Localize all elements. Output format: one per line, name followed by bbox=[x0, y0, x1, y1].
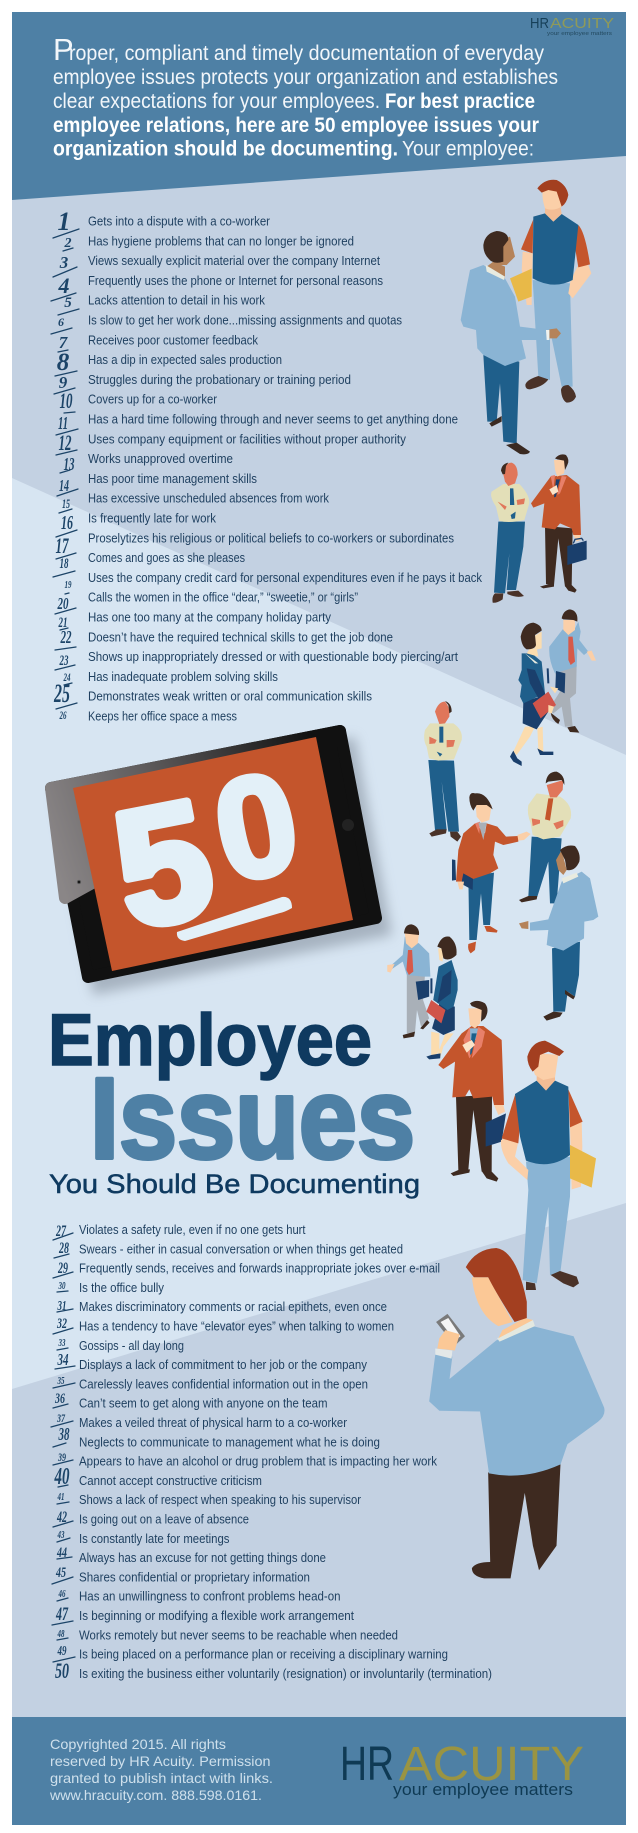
issue 29: 29 bbox=[57, 1260, 68, 1277]
issue 4: Frequently uses the phone or Internet for personal reasons bbox=[88, 273, 383, 288]
issue 11 bbox=[56, 412, 458, 435]
issue 47: 47 bbox=[55, 1604, 69, 1625]
issue 50 bbox=[55, 1658, 492, 1683]
issue 14: 14 bbox=[59, 476, 69, 495]
issue 39 bbox=[53, 1450, 437, 1469]
footer copyright: www.hracuity.com. 888.598.0161. bbox=[49, 1787, 262, 1803]
issue 20 bbox=[55, 590, 358, 614]
issue 9 bbox=[54, 372, 351, 394]
issue 17: 17 bbox=[56, 533, 69, 558]
issue 33: 33 bbox=[58, 1337, 66, 1349]
issue 12 bbox=[56, 430, 406, 455]
issue 8: 8 bbox=[57, 349, 70, 376]
issue 29 bbox=[53, 1260, 440, 1278]
issue 37 bbox=[51, 1411, 348, 1430]
issue 2: Has hygiene problems that can no longer be ignored bbox=[88, 233, 354, 248]
intro text: clear expectations for your employees. bbox=[53, 90, 380, 113]
issue 45 bbox=[52, 1565, 310, 1584]
issue 23: 23 bbox=[59, 653, 69, 669]
issue 36 bbox=[53, 1391, 328, 1411]
issue 32: Has a tendency to have “elevator eyes” when talking to women bbox=[79, 1318, 394, 1334]
issue 5: 5 bbox=[64, 295, 72, 311]
issue 44: 44 bbox=[56, 1545, 67, 1561]
issue 15 bbox=[59, 491, 329, 513]
issue 39: Appears to have an alcohol or drug problem that is impacting her work bbox=[79, 1454, 437, 1469]
issue 16: Is frequently late for work bbox=[88, 510, 216, 526]
issue 8: Has a dip in expected sales production bbox=[88, 352, 282, 367]
issue 48: 48 bbox=[57, 1628, 65, 1640]
intro text: Your employee: bbox=[402, 138, 534, 160]
issue 6 bbox=[51, 312, 402, 334]
issue 12: Uses company equipment or facilities without proper authority bbox=[88, 431, 406, 446]
issue 48: Works remotely but never seems to be reachable when needed bbox=[79, 1627, 398, 1642]
issue 13: 13 bbox=[64, 454, 74, 474]
issue 10: 10 bbox=[60, 388, 72, 413]
issue 47 bbox=[52, 1604, 354, 1625]
figures: group of three and man in sweater bbox=[424, 701, 598, 1021]
issue 41: Shows a lack of respect when speaking to his supervisor bbox=[79, 1492, 362, 1507]
top logo: ACUITY bbox=[550, 15, 614, 32]
issue 1: Gets into a dispute with a co-worker bbox=[88, 214, 271, 228]
issue 28: Swears - either in casual conversation or when things get heated bbox=[79, 1241, 403, 1256]
issue 30: 30 bbox=[58, 1280, 66, 1292]
issue 22: Doesn’t have the required technical skills to get the job done bbox=[88, 629, 393, 644]
issue 45: Shares confidential or proprietary information bbox=[79, 1569, 310, 1584]
issue 22 bbox=[55, 627, 393, 650]
tablet with 50: 5 bbox=[101, 765, 226, 963]
issue 25: 25 bbox=[53, 679, 70, 708]
issue 12: 12 bbox=[58, 430, 72, 455]
issue 13: Works unapproved overtime bbox=[88, 451, 233, 466]
issue 19 bbox=[64, 570, 482, 594]
issue 2: 2 bbox=[64, 236, 72, 251]
issue 18 bbox=[53, 550, 245, 577]
issue 18: 18 bbox=[60, 556, 69, 572]
issue 5 bbox=[58, 293, 265, 315]
issue 34: 34 bbox=[57, 1350, 68, 1369]
top logo: your employee matters bbox=[547, 31, 613, 37]
issue 42 bbox=[53, 1509, 249, 1527]
issue 30: Is the office bully bbox=[79, 1280, 164, 1295]
issue 37: Makes a veiled threat of physical harm to a co-worker bbox=[79, 1415, 348, 1430]
issue list 1 to 26 bbox=[51, 207, 482, 724]
issue 41: 41 bbox=[57, 1491, 64, 1503]
issue 23 bbox=[55, 649, 458, 670]
intro text: roper, compliant and timely documentation of everyday bbox=[69, 42, 544, 65]
issue 42: Is going out on a leave of absence bbox=[79, 1512, 249, 1526]
issue 16: 16 bbox=[61, 512, 73, 534]
issue 50: Is exiting the business either voluntarily (resignation) or involuntarily (termination) bbox=[79, 1666, 492, 1681]
issue 31: 31 bbox=[57, 1299, 66, 1314]
issue 37: 37 bbox=[56, 1411, 66, 1425]
issue 24: Has inadequate problem solving skills bbox=[88, 669, 278, 684]
issue 42: 42 bbox=[56, 1509, 67, 1526]
issue 15: Has excessive unscheduled absences from work bbox=[88, 491, 329, 506]
issue 20: Calls the women in the office “dear,” “sweetie,” or “girls” bbox=[88, 590, 358, 605]
issue 23: Shows up inappropriately dressed or with questionable body piercing/art bbox=[88, 649, 458, 664]
issue 34: Displays a lack of commitment to her job or the company bbox=[79, 1357, 367, 1372]
figures: bald man and man in orange jacket, walking pair bbox=[491, 454, 596, 766]
footer copyright: granted to publish intact with links. bbox=[50, 1770, 273, 1786]
issue 40: Cannot accept constructive criticism bbox=[79, 1473, 262, 1488]
footer copyright: Copyrighted 2015. All rights bbox=[50, 1736, 226, 1752]
figures: man in orange jacket and man with folder bbox=[438, 1001, 596, 1290]
issue 35: Carelessly leaves confidential information out in the open bbox=[79, 1376, 368, 1391]
issue 40: 40 bbox=[54, 1464, 70, 1490]
issue 6: 6 bbox=[58, 315, 64, 329]
footer logo: HR bbox=[340, 1738, 394, 1791]
issue 29: Frequently sends, receives and forwards inappropriate jokes over e-mail bbox=[79, 1261, 440, 1276]
issue 10 bbox=[60, 388, 218, 413]
issue 19: 19 bbox=[64, 579, 72, 591]
light diagonal band bbox=[12, 478, 626, 1389]
issue 38: 38 bbox=[58, 1424, 70, 1444]
title: Employee: Employee bbox=[48, 1000, 372, 1081]
issue 28 bbox=[54, 1240, 403, 1258]
issue 39: 39 bbox=[57, 1450, 66, 1464]
footer band bbox=[12, 1717, 626, 1825]
issue 43: 43 bbox=[57, 1529, 65, 1541]
figure: man from behind looking at phone bbox=[429, 1248, 605, 1578]
issue 15: 15 bbox=[62, 496, 70, 511]
issue 21: 21 bbox=[58, 615, 68, 631]
issue 13 bbox=[60, 451, 233, 474]
top logo: HR bbox=[530, 15, 549, 32]
issue 4: 4 bbox=[58, 273, 70, 298]
issue 21 bbox=[58, 610, 331, 631]
issue 45: 45 bbox=[55, 1565, 66, 1581]
issue 27: 27 bbox=[55, 1223, 67, 1240]
issue 18: Comes and goes as she pleases bbox=[88, 550, 245, 565]
issue 46: Has an unwillingness to confront problems head-on bbox=[79, 1589, 340, 1604]
issue 22: 22 bbox=[60, 627, 72, 647]
header banner bbox=[12, 12, 626, 200]
issue 46: 46 bbox=[58, 1588, 66, 1600]
issue 5: Lacks attention to detail in his work bbox=[88, 293, 265, 308]
issue 31: Makes discriminatory comments or racial epithets, even once bbox=[79, 1299, 387, 1314]
issue 33 bbox=[57, 1337, 184, 1353]
issue 14 bbox=[57, 471, 257, 496]
issue 32 bbox=[53, 1316, 394, 1334]
issue 3: 3 bbox=[59, 253, 69, 272]
issue 20: 20 bbox=[57, 594, 69, 613]
issue 1: 1 bbox=[58, 207, 70, 236]
intro text: organization should be documenting. bbox=[53, 138, 398, 160]
issue 9: 9 bbox=[59, 373, 68, 392]
issue 26: 26 bbox=[59, 708, 66, 722]
issue 21: Has one too many at the company holiday party bbox=[88, 610, 331, 624]
issue 27: Violates a safety rule, even if no one gets hurt bbox=[79, 1222, 306, 1237]
issue 17: Proselytizes his religious or political beliefs to co-workers or subordinates bbox=[88, 530, 454, 545]
issue 43: Is constantly late for meetings bbox=[79, 1531, 230, 1546]
issue 19: Uses the company credit card for personal expenditures even if he pays it back bbox=[88, 570, 482, 585]
issue 8 bbox=[55, 349, 282, 376]
issue 11: Has a hard time following through and never seems to get anything done bbox=[88, 412, 458, 426]
issue 17 bbox=[56, 530, 454, 559]
footer logo bbox=[340, 1738, 584, 1799]
footer copyright: reserved by HR Acuity. Permission bbox=[50, 1753, 270, 1769]
issue 49: Is being placed on a performance plan or receiving a disciplinary warning bbox=[79, 1647, 448, 1662]
intro text bbox=[53, 32, 558, 160]
issue list 27 to 50 bbox=[51, 1222, 492, 1683]
issue 14: Has poor time management skills bbox=[88, 471, 257, 486]
issue 40 bbox=[54, 1464, 262, 1490]
issue 7: Receives poor customer feedback bbox=[88, 332, 258, 347]
issue 47: Is beginning or modifying a flexible work arrangement bbox=[79, 1608, 354, 1623]
intro text: employee relations, here are 50 employee issues your bbox=[53, 114, 539, 137]
issue 38 bbox=[53, 1424, 380, 1449]
issue 10: Covers up for a co-worker bbox=[88, 392, 218, 407]
intro text: P bbox=[53, 32, 74, 67]
issue 50: 50 bbox=[55, 1658, 69, 1683]
issue 36: Can’t seem to get along with anyone on the team bbox=[79, 1396, 328, 1411]
issue 33: Gossips - all day long bbox=[79, 1338, 184, 1353]
issue 26: Keeps her office space a mess bbox=[88, 708, 237, 724]
footer copyright bbox=[49, 1736, 273, 1803]
issue 35: 35 bbox=[57, 1375, 65, 1387]
issue 7 bbox=[58, 332, 258, 352]
issue 11: 11 bbox=[58, 413, 68, 433]
tablet with 50 bbox=[51, 731, 392, 995]
issue 9: Struggles during the probationary or training period bbox=[88, 372, 351, 387]
top logo bbox=[530, 15, 614, 37]
issue 25 bbox=[53, 679, 372, 709]
issue 4 bbox=[51, 273, 383, 301]
footer logo: ACUITY bbox=[399, 1738, 584, 1791]
issue 25: Demonstrates weak written or oral communication skills bbox=[88, 689, 372, 704]
issue 38: Neglects to communicate to management what he is doing bbox=[79, 1434, 380, 1449]
intro text: employee issues protects your organization and establishes bbox=[53, 66, 558, 89]
issue 24: 24 bbox=[63, 670, 70, 684]
issue 49: 49 bbox=[57, 1644, 66, 1659]
issue 32: 32 bbox=[56, 1316, 67, 1332]
issue 3 bbox=[53, 253, 380, 277]
issue 6: Is slow to get her work done...missing assignments and quotas bbox=[88, 312, 402, 328]
issue 44: Always has an excuse for not getting things done bbox=[79, 1550, 326, 1565]
issue 28: 28 bbox=[58, 1240, 69, 1257]
issue 44 bbox=[56, 1545, 326, 1565]
subtitle: You Should Be Documenting bbox=[49, 1169, 420, 1199]
intro text: For best practice bbox=[385, 90, 535, 113]
issue 3: Views sexually explicit material over the company Internet bbox=[88, 253, 380, 268]
title: Issues: Issues bbox=[90, 1055, 415, 1183]
issue 36: 36 bbox=[54, 1391, 65, 1407]
figures: small walking pair bbox=[387, 924, 458, 1059]
issue 1 bbox=[53, 207, 271, 238]
issue 34 bbox=[55, 1350, 367, 1372]
issue 7: 7 bbox=[59, 333, 69, 352]
figures: two men talking bbox=[461, 180, 591, 454]
tablet with 50: 0 bbox=[202, 742, 311, 913]
issue 16 bbox=[56, 510, 216, 537]
footer logo: your employee matters bbox=[393, 1780, 573, 1799]
issue 27 bbox=[53, 1222, 306, 1240]
